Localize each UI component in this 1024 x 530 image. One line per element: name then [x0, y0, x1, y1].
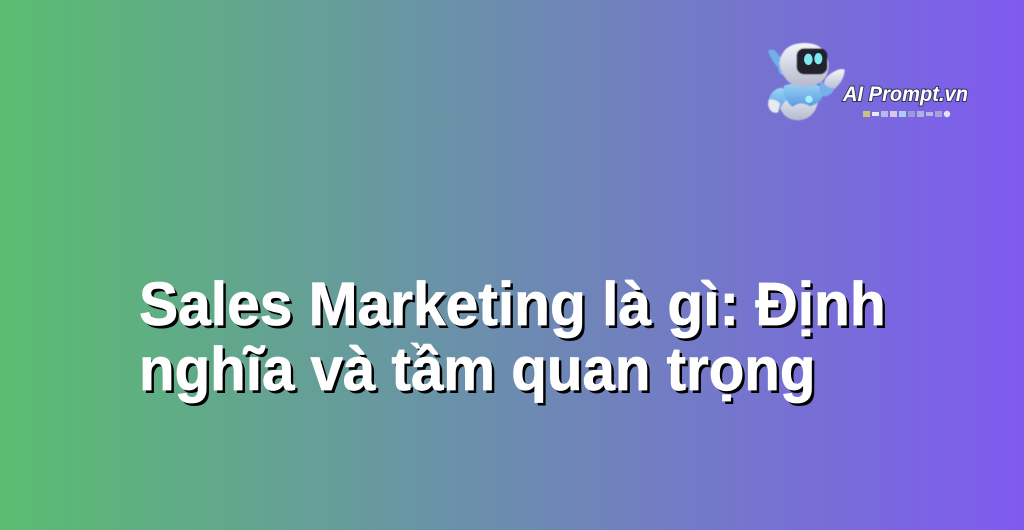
logo tagline chips [863, 111, 950, 117]
title line 2: nghĩa và tầm quan trọng [139, 335, 815, 403]
icon: robot mascot [768, 43, 845, 120]
title line 1: Sales Marketing là gì: Định [139, 270, 886, 338]
logo: AI Prompt.vn [767, 42, 968, 121]
title [139, 270, 886, 406]
logo wordmark: AI Prompt.vn [842, 83, 968, 106]
